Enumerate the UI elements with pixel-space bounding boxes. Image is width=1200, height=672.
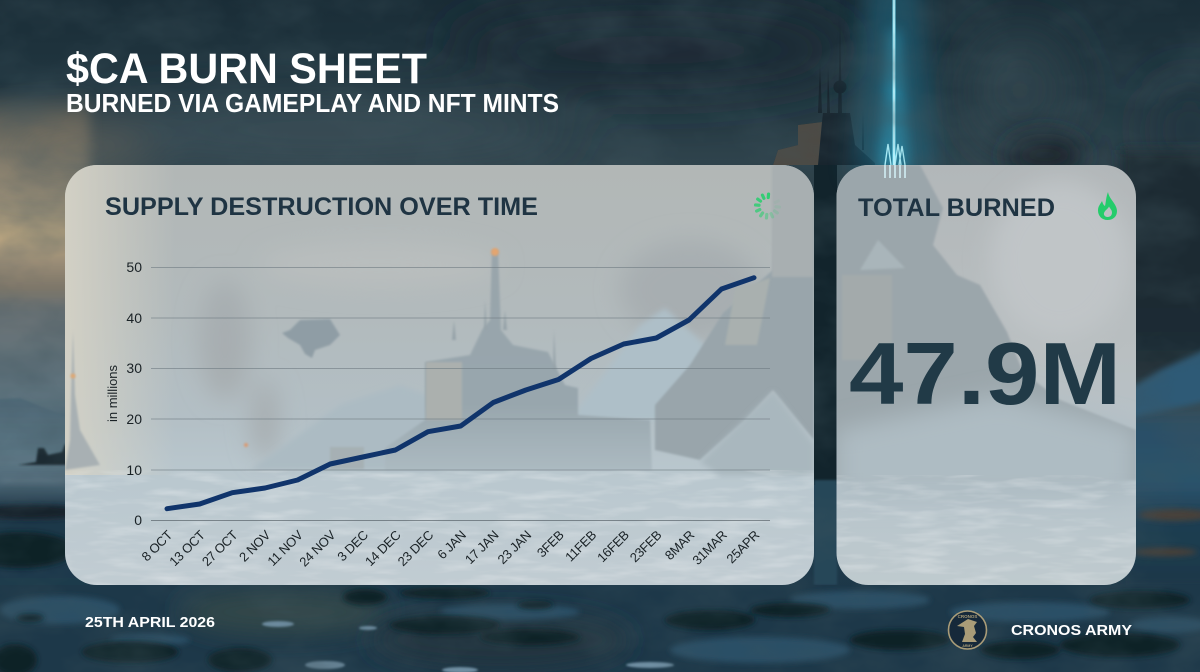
panel: supply destruction over time bbox=[65, 165, 814, 585]
subtitle: BURNED VIA GAMEPLAY AND NFT MINTS bbox=[66, 88, 559, 118]
x axis labels: 11 NOV bbox=[264, 527, 306, 569]
y axis labels: 40 bbox=[126, 310, 142, 326]
x axis labels: 13 OCT bbox=[166, 527, 208, 569]
x axis labels: 2 NOV bbox=[236, 527, 274, 565]
title block bbox=[66, 45, 559, 118]
burn line bbox=[167, 278, 754, 509]
y axis labels: 10 bbox=[126, 462, 142, 478]
x axis labels: 8 OCT bbox=[138, 527, 175, 564]
x axis labels: 24 NOV bbox=[296, 527, 339, 570]
x axis labels: 6 JAN bbox=[434, 528, 469, 562]
mist lines bbox=[65, 470, 814, 585]
y axis labels: 0 bbox=[134, 512, 142, 528]
x axis labels: 23 DEC bbox=[395, 528, 436, 569]
icon: spinner bbox=[754, 193, 781, 219]
central fortress bbox=[385, 250, 652, 470]
heading: TOTAL BURNED bbox=[858, 194, 1055, 222]
x axis labels: 11FEB bbox=[562, 528, 599, 564]
ship silhouette bbox=[282, 319, 340, 358]
x axis labels: 3FEB bbox=[534, 528, 567, 560]
x axis labels bbox=[138, 527, 762, 570]
main tower behind panels bbox=[773, 25, 875, 165]
x axis labels: 8MAR bbox=[662, 528, 697, 563]
logo badge: CRONOS bbox=[958, 614, 977, 619]
x axis labels: 25APR bbox=[723, 528, 762, 566]
y axis labels: 20 bbox=[126, 411, 142, 427]
x axis labels: 23FEB bbox=[627, 528, 664, 565]
x axis labels: 3 DEC bbox=[334, 528, 371, 564]
y axis labels: 50 bbox=[126, 259, 142, 275]
x axis labels: 31MAR bbox=[689, 528, 730, 568]
y axis title: in millions bbox=[105, 364, 120, 422]
brand name: CRONOS ARMY bbox=[1011, 623, 1132, 639]
logo badge: ARMY bbox=[962, 644, 973, 648]
title: $CA BURN SHEET bbox=[66, 45, 427, 93]
x axis labels: 27 OCT bbox=[199, 527, 241, 569]
logo badge bbox=[948, 611, 986, 649]
panel scenery bbox=[65, 165, 814, 585]
right strip bbox=[1120, 150, 1200, 590]
date: 25TH APRIL 2026 bbox=[85, 614, 215, 631]
right fortress bbox=[655, 165, 814, 475]
panel: total burned bbox=[836, 165, 1136, 585]
x axis labels: 16FEB bbox=[594, 528, 632, 565]
y axis labels: 30 bbox=[126, 360, 142, 376]
x axis labels: 14 DEC bbox=[362, 528, 404, 569]
distant left tower bbox=[65, 330, 100, 470]
total value: 47.9M bbox=[849, 324, 1121, 423]
x axis labels: 23 JAN bbox=[495, 528, 534, 567]
left foreground waves bbox=[0, 478, 85, 568]
ground and rocks bbox=[0, 509, 1200, 672]
x axis labels: 17 JAN bbox=[462, 528, 501, 567]
y axis labels bbox=[126, 259, 142, 528]
heading: SUPPLY DESTRUCTION OVER TIME bbox=[105, 193, 538, 221]
icon: flame bbox=[1098, 192, 1117, 220]
light beam bbox=[852, 0, 936, 175]
grid lines bbox=[151, 268, 770, 520]
panel scenery bbox=[836, 165, 1136, 585]
